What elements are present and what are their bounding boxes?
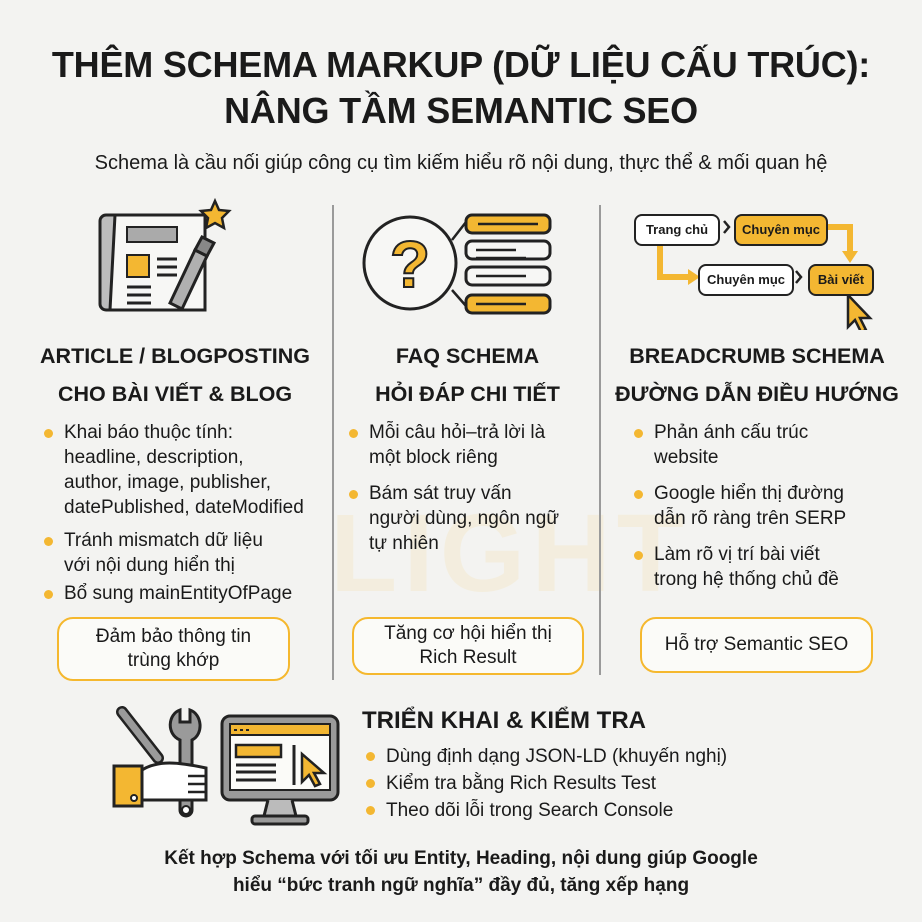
panel: breadcrumb [615,344,899,673]
bullets: breadcrumb: Làm rõ vị trí bài viết [654,544,820,565]
footer text: hiểu “bức tranh ngữ nghĩa” đầy đủ, tăng xếp hạng [233,875,689,896]
icon: tools hand [112,706,208,818]
bullets: article [44,422,304,604]
bullets: article: Bổ sung mainEntityOfPage [64,583,292,604]
bullets: deploy [366,746,727,821]
bullets: article: Tránh mismatch dữ liệu [64,530,263,551]
heading: article: ARTICLE / BLOGPOSTING [40,344,310,368]
panel: deploy & check [362,706,727,821]
bullets: FAQ: tự nhiên [369,533,439,554]
bullets: breadcrumb: Google hiển thị đường [654,483,844,504]
callout: breadcrumb: Hỗ trợ Semantic SEO [665,634,848,655]
callout: FAQ [352,617,584,675]
icon: breadcrumb: Bài viết [818,272,864,287]
panel: article [40,344,310,681]
title: NÂNG TẦM SEMANTIC SEO [224,90,698,131]
bullets: FAQ [349,421,559,554]
heading: deploy: TRIỂN KHAI & KIỂM TRA [362,707,646,734]
icon: monitor [220,714,340,826]
bullets: FAQ: người dùng, ngôn ngữ [369,508,559,529]
bullets: deploy: Theo dõi lỗi trong Search Console [386,800,673,821]
bullets: breadcrumb [634,422,846,590]
callout: article: trùng khớp [128,650,219,671]
heading: article [40,344,310,406]
bullets: deploy: Kiểm tra bằng Rich Results Test [386,773,656,794]
callout: article [57,617,290,681]
icon: article newspaper with pen [98,198,232,312]
bullets: breadcrumb: trong hệ thống chủ đề [654,569,839,590]
footer text [164,848,758,896]
callout: article: Đảm bảo thông tin [96,626,251,647]
icon: breadcrumb: Chuyên mục [742,222,820,237]
heading: breadcrumb: ĐƯỜNG DẪN ĐIỀU HƯỚNG [615,382,899,406]
icon: breadcrumb: Trang chủ [646,222,708,237]
panel: FAQ [349,344,584,675]
bullets: FAQ: Mỗi câu hỏi–trả lời là [369,422,545,443]
bullets: article: datePublished, dateModified [64,497,304,518]
heading: breadcrumb [615,344,899,406]
callout: FAQ: Tăng cơ hội hiển thị [384,623,552,644]
bullets: breadcrumb: dẫn rõ ràng trên SERP [654,508,846,529]
icon: FAQ question: ? [390,227,430,301]
bullets: FAQ: Bám sát truy vấn [369,483,512,504]
icon: FAQ question [362,214,552,314]
footer text: Kết hợp Schema với tối ưu Entity, Heading, nội dung giúp Google [164,848,758,869]
title [52,44,870,131]
bullets: deploy: Dùng định dạng JSON-LD (khuyến nghị) [386,746,727,767]
bullets: breadcrumb: website [654,447,718,468]
bullets: article: Khai báo thuộc tính: [64,422,233,443]
callout: breadcrumb [640,617,873,673]
watermark: LIGHT [330,492,690,615]
icon: breadcrumb: Chuyên mục [707,272,785,287]
bullets: article: headline, description, [64,447,244,468]
icon: breadcrumb [634,214,874,330]
bullets: article: với nội dung hiển thị [64,555,235,576]
heading: FAQ: HỎI ĐÁP CHI TIẾT [375,382,560,406]
heading: FAQ: FAQ SCHEMA [396,344,539,368]
callout: FAQ: Rich Result [419,647,517,668]
bullets: FAQ: một block riêng [369,447,498,468]
bullets: article: author, image, publisher, [64,472,271,493]
heading: breadcrumb: BREADCRUMB SCHEMA [629,344,885,368]
title: THÊM SCHEMA MARKUP (DỮ LIỆU CẤU TRÚC): [52,44,870,85]
subtitle: Schema là cầu nối giúp công cụ tìm kiếm hiểu rõ nội dung, thực thể & mối quan hệ [95,152,827,174]
heading: FAQ [375,344,560,406]
bullets: breadcrumb: Phản ánh cấu trúc [654,422,808,443]
heading: article: CHO BÀI VIẾT & BLOG [58,382,292,406]
